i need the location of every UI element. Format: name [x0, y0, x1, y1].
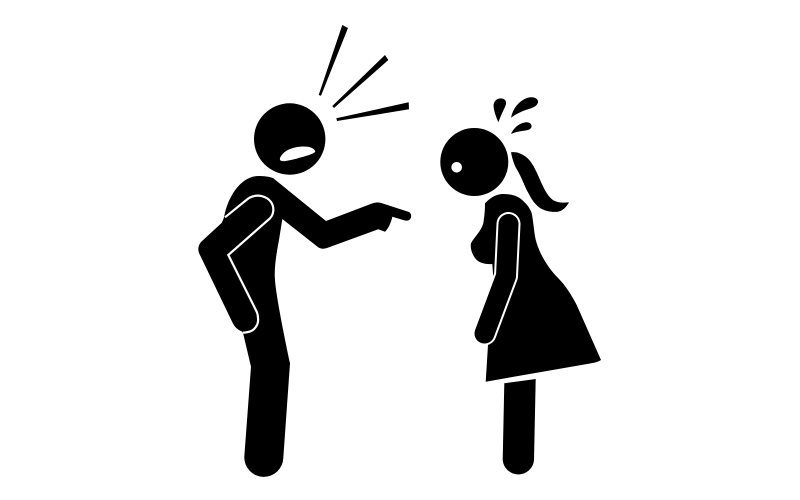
figure: shouting man [198, 25, 411, 477]
woman head [440, 128, 508, 196]
man open mouth [280, 147, 315, 161]
man head [254, 103, 325, 175]
woman leg [503, 379, 536, 474]
man bent arm [198, 196, 273, 332]
figure: woman with bowed head [440, 97, 601, 474]
man bent arm outline [225, 196, 273, 333]
man body and pointing arm [215, 176, 411, 477]
woman arm outline [484, 224, 508, 334]
woman dress [471, 194, 601, 382]
icon: shout lines [319, 25, 409, 121]
woman arm [484, 224, 508, 334]
woman ponytail [511, 152, 569, 212]
woman eye [451, 162, 462, 173]
icon: sweat drops [494, 97, 538, 134]
